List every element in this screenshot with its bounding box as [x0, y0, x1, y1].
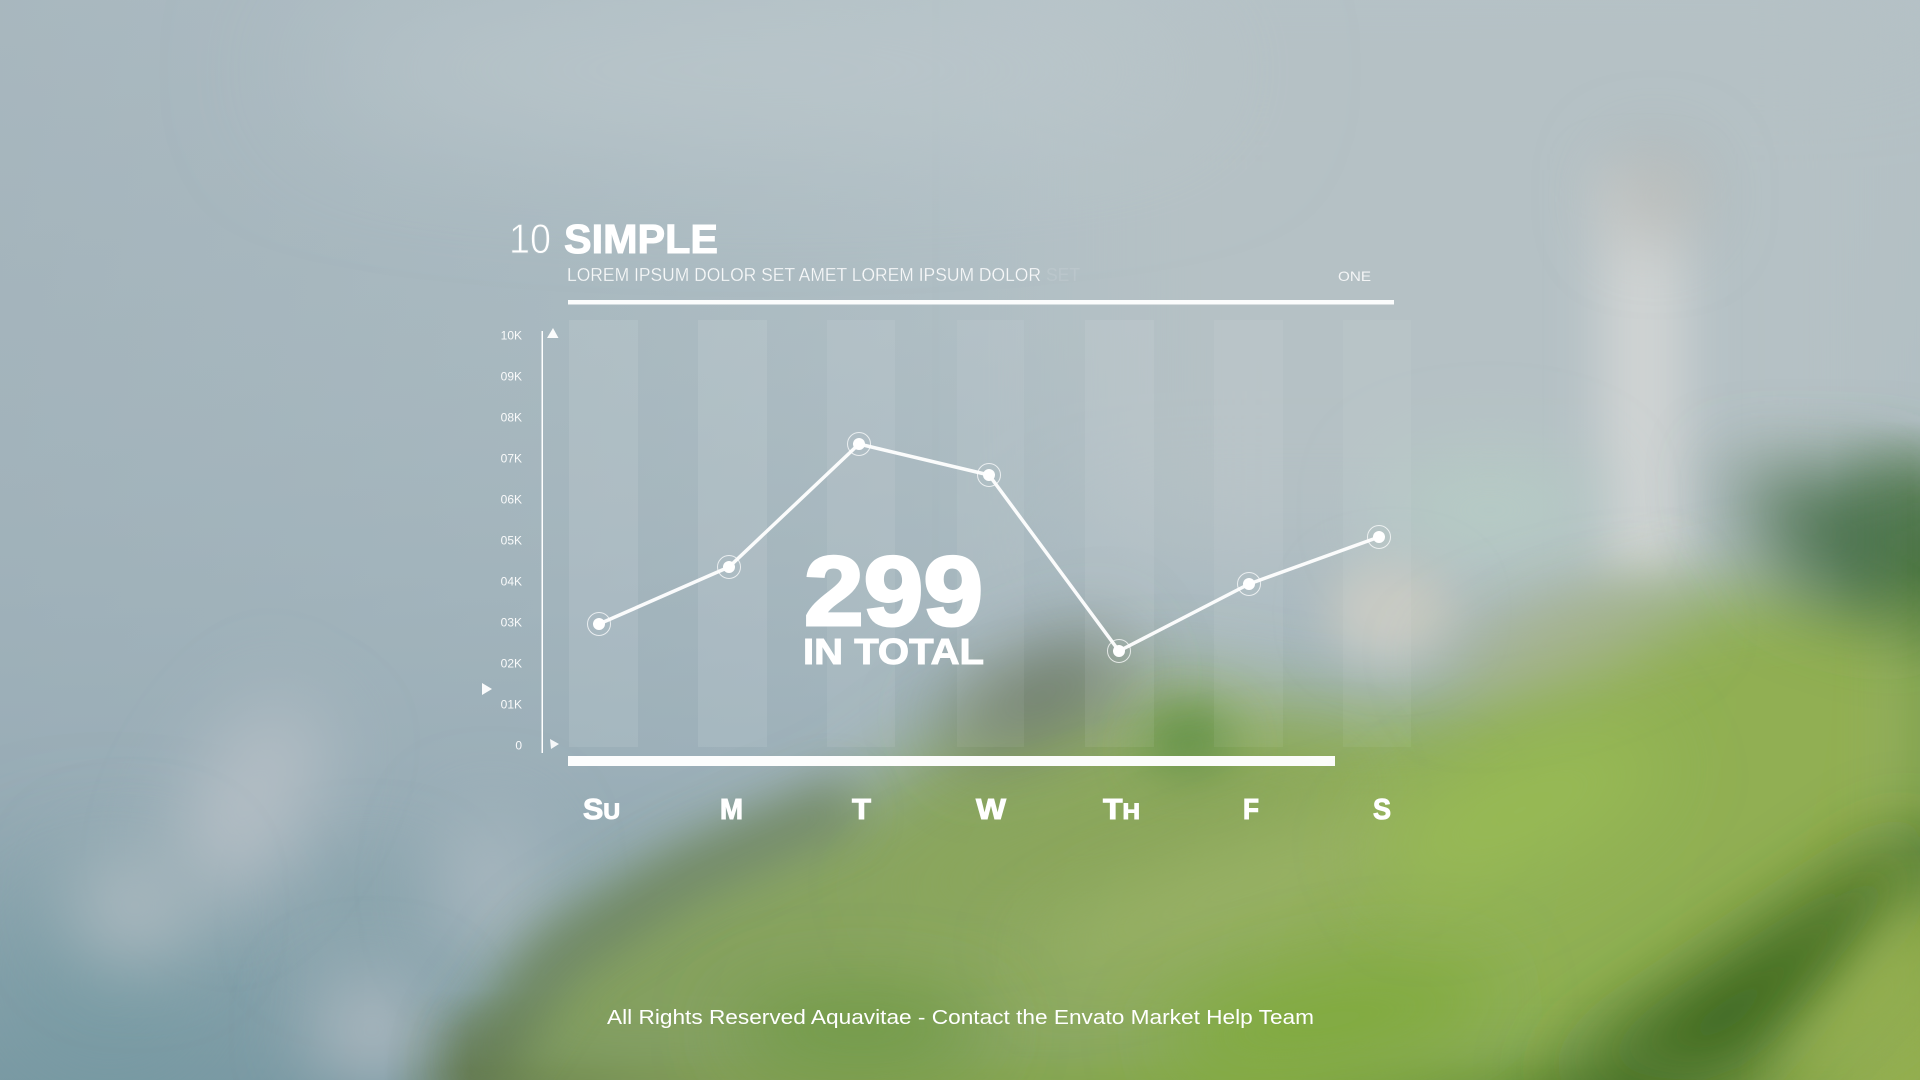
- line chart: [588, 432, 1390, 662]
- icon: zero arrow: [550, 739, 559, 749]
- total value: 299: [804, 536, 983, 646]
- y axis labels: 02K: [501, 656, 522, 670]
- title: 10 SIMPLE: SIMPLE: [564, 216, 718, 262]
- vertical bars: [569, 320, 1411, 747]
- icon: up arrow: [547, 328, 558, 338]
- subtitle: LOREM IPSUM DOLOR SET AMET LOREM IPSUM DOLOR: [567, 265, 1041, 285]
- day labels: M: [720, 794, 743, 826]
- y axis labels: 03K: [501, 616, 522, 630]
- label: one: ONE: [1338, 268, 1371, 284]
- footer credit: All Rights Reserved Aquavitae - Contact the Envato Market Help Team: [607, 1007, 1314, 1029]
- subtitle: SET: [1046, 265, 1080, 285]
- y axis labels: 10K: [501, 328, 522, 342]
- y axis: [501, 328, 559, 753]
- title: 10 SIMPLE: 10: [509, 215, 551, 262]
- day labels: S: [1373, 794, 1391, 826]
- y axis labels: 07K: [501, 452, 522, 466]
- day labels: [583, 794, 1391, 826]
- y axis labels: 01K: [501, 698, 522, 712]
- day labels: F: [1243, 794, 1259, 826]
- y axis labels: [501, 328, 522, 752]
- y axis labels: 05K: [501, 534, 522, 548]
- y axis labels: 08K: [501, 410, 522, 424]
- day labels: SU: [583, 794, 620, 826]
- top rule: [568, 300, 1394, 304]
- day labels: TH: [1103, 794, 1140, 826]
- bottom axis bar: [568, 756, 1335, 766]
- day labels: T: [852, 794, 871, 826]
- y axis labels: 06K: [501, 492, 522, 506]
- day labels: W: [976, 794, 1007, 826]
- total value: IN TOTAL: [803, 631, 984, 672]
- icon: side arrow: [482, 683, 492, 695]
- y axis labels: 04K: [501, 574, 522, 588]
- y axis labels: 0: [515, 738, 522, 752]
- y axis labels: 09K: [501, 370, 522, 384]
